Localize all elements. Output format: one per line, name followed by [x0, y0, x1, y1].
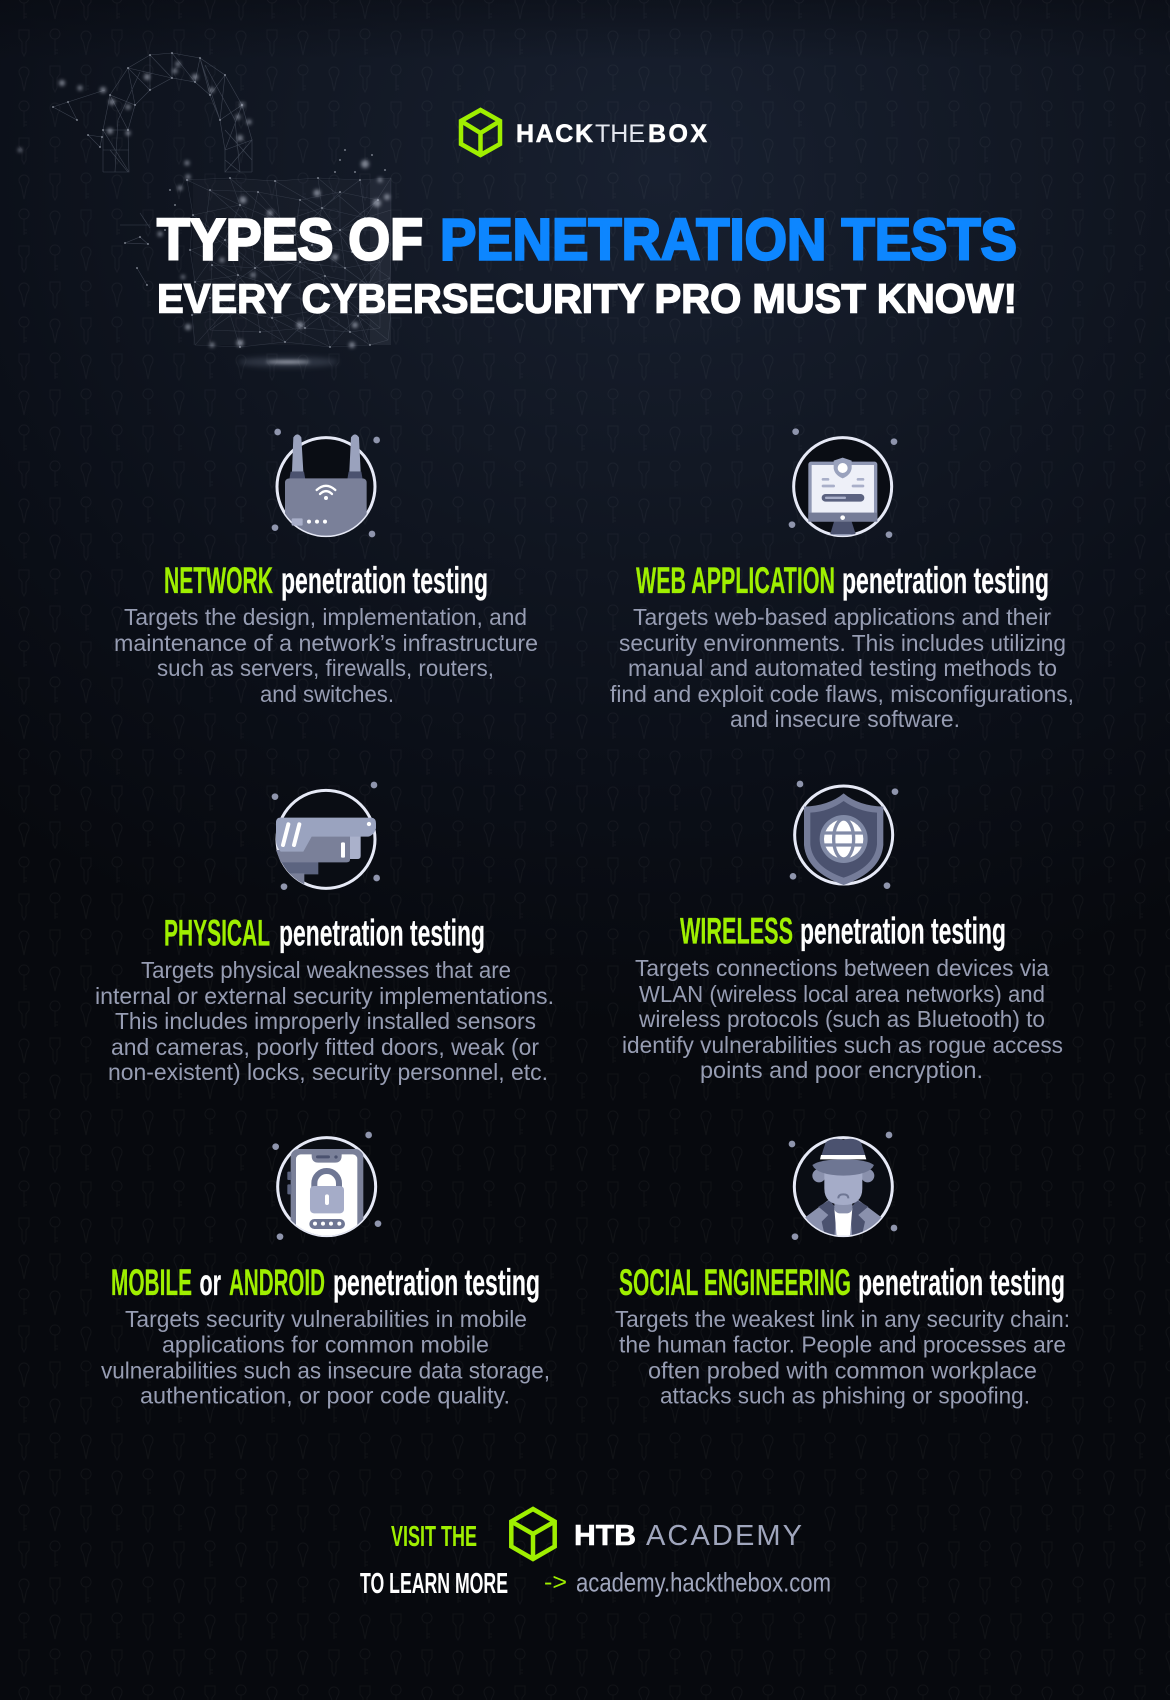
heading: MOBILE	[111, 1262, 192, 1303]
description: This includes improperly installed sensors	[115, 1008, 536, 1034]
logo wordmark: HACK	[516, 120, 593, 148]
description: Targets connections between devices via	[635, 955, 1050, 981]
heading: WEB APPLICATION	[636, 560, 835, 601]
heading	[164, 560, 488, 601]
description	[610, 604, 1074, 732]
title: EVERY CYBERSECURITY PRO MUST KNOW!	[157, 276, 1017, 322]
heading: WIRELESS	[680, 910, 793, 952]
decorative wireframe padlock	[18, 53, 391, 367]
description: Targets the weakest link in any security chain:	[615, 1306, 1070, 1332]
description: security environments. This includes utilizing	[619, 630, 1066, 656]
description: Targets security vulnerabilities in mobile	[125, 1306, 527, 1332]
icon: HTB Academy cube	[511, 1509, 555, 1559]
description: and switches.	[260, 681, 394, 707]
description: and insecure software.	[730, 706, 960, 732]
panel: mobile or android penetration testing	[101, 1132, 550, 1408]
footer text: visit the: VISIT THE	[391, 1521, 477, 1553]
heading: penetration testing	[800, 910, 1006, 952]
heading: SOCIAL ENGINEERING	[619, 1262, 851, 1303]
description: identify vulnerabilities such as rogue access	[622, 1032, 1063, 1058]
icon: green cube	[461, 110, 500, 155]
description: non-existent) locks, security personnel, etc.	[108, 1059, 548, 1085]
logo: Hack The Box	[461, 110, 707, 155]
heading: penetration testing	[842, 560, 1049, 601]
panel: wireless penetration testing	[622, 781, 1063, 1083]
description: often probed with common workplace	[648, 1358, 1037, 1384]
description: internal or external security implementations.	[95, 983, 554, 1009]
description: attacks such as phishing or spoofing.	[660, 1382, 1030, 1408]
description: manual and automated testing methods to	[628, 655, 1057, 681]
description: authentication, or poor code quality.	[140, 1382, 510, 1408]
description	[101, 1306, 550, 1408]
description: WLAN (wireless local area networks) and	[639, 981, 1045, 1007]
icon: phone with padlock	[272, 1132, 381, 1244]
description: applications for common mobile	[162, 1332, 489, 1358]
heading	[111, 1262, 540, 1303]
logo text: HTB: HTB	[574, 1520, 636, 1552]
description: find and exploit code flaws, misconfigurations,	[610, 681, 1074, 707]
description: Targets web-based applications and their	[633, 604, 1051, 630]
heading: PHYSICAL	[164, 912, 270, 954]
title	[157, 208, 1017, 322]
panel: web application penetration testing	[610, 428, 1074, 732]
heading: penetration testing	[279, 912, 485, 954]
heading: ANDROID	[229, 1262, 325, 1303]
description	[622, 955, 1063, 1083]
description: maintenance of a network’s infrastructure	[114, 630, 538, 656]
description: such as servers, firewalls, routers,	[157, 655, 494, 681]
heading: penetration testing	[281, 560, 488, 601]
heading: penetration testing	[333, 1262, 540, 1303]
description	[114, 604, 538, 707]
title: PENETRATION TESTS	[440, 208, 1017, 272]
description: vulnerabilities such as insecure data storage,	[101, 1358, 550, 1384]
logo text: Academy: ACADEMY	[646, 1520, 802, 1552]
heading	[680, 910, 1006, 952]
icon: router	[272, 429, 380, 540]
footer text: to learn more: TO LEARN MORE	[360, 1568, 508, 1600]
icon: shield with globe	[790, 781, 898, 889]
description: and cameras, poorly fitted doors, weak (or	[111, 1034, 539, 1060]
heading: or	[200, 1262, 221, 1303]
panel: network penetration testing	[114, 429, 538, 707]
description: wireless protocols (such as Bluetooth) to	[638, 1006, 1045, 1032]
logo wordmark	[516, 120, 707, 148]
footer call to action	[360, 1509, 831, 1600]
panel: physical penetration testing	[95, 782, 554, 1085]
description: the human factor. People and processes are	[619, 1332, 1066, 1358]
description	[615, 1306, 1070, 1408]
description: Targets physical weaknesses that are	[141, 957, 511, 983]
icon: pistol	[272, 782, 380, 890]
description	[95, 957, 554, 1085]
title: TYPES OF	[157, 208, 423, 272]
description: Targets the design, implementation, and	[124, 604, 527, 630]
heading: NETWORK	[164, 560, 273, 601]
logo wordmark: BOX	[648, 120, 707, 148]
heading	[164, 912, 485, 954]
icon: monitor	[789, 428, 897, 538]
logo wordmark: THE	[595, 120, 645, 148]
footer link: academy.hackthebox.com	[576, 1568, 831, 1598]
panel: social engineering penetration testing	[615, 1132, 1070, 1408]
description: points and poor encryption.	[700, 1057, 983, 1083]
arrow: ->	[544, 1569, 567, 1596]
icon: figure in a hat	[789, 1132, 897, 1240]
